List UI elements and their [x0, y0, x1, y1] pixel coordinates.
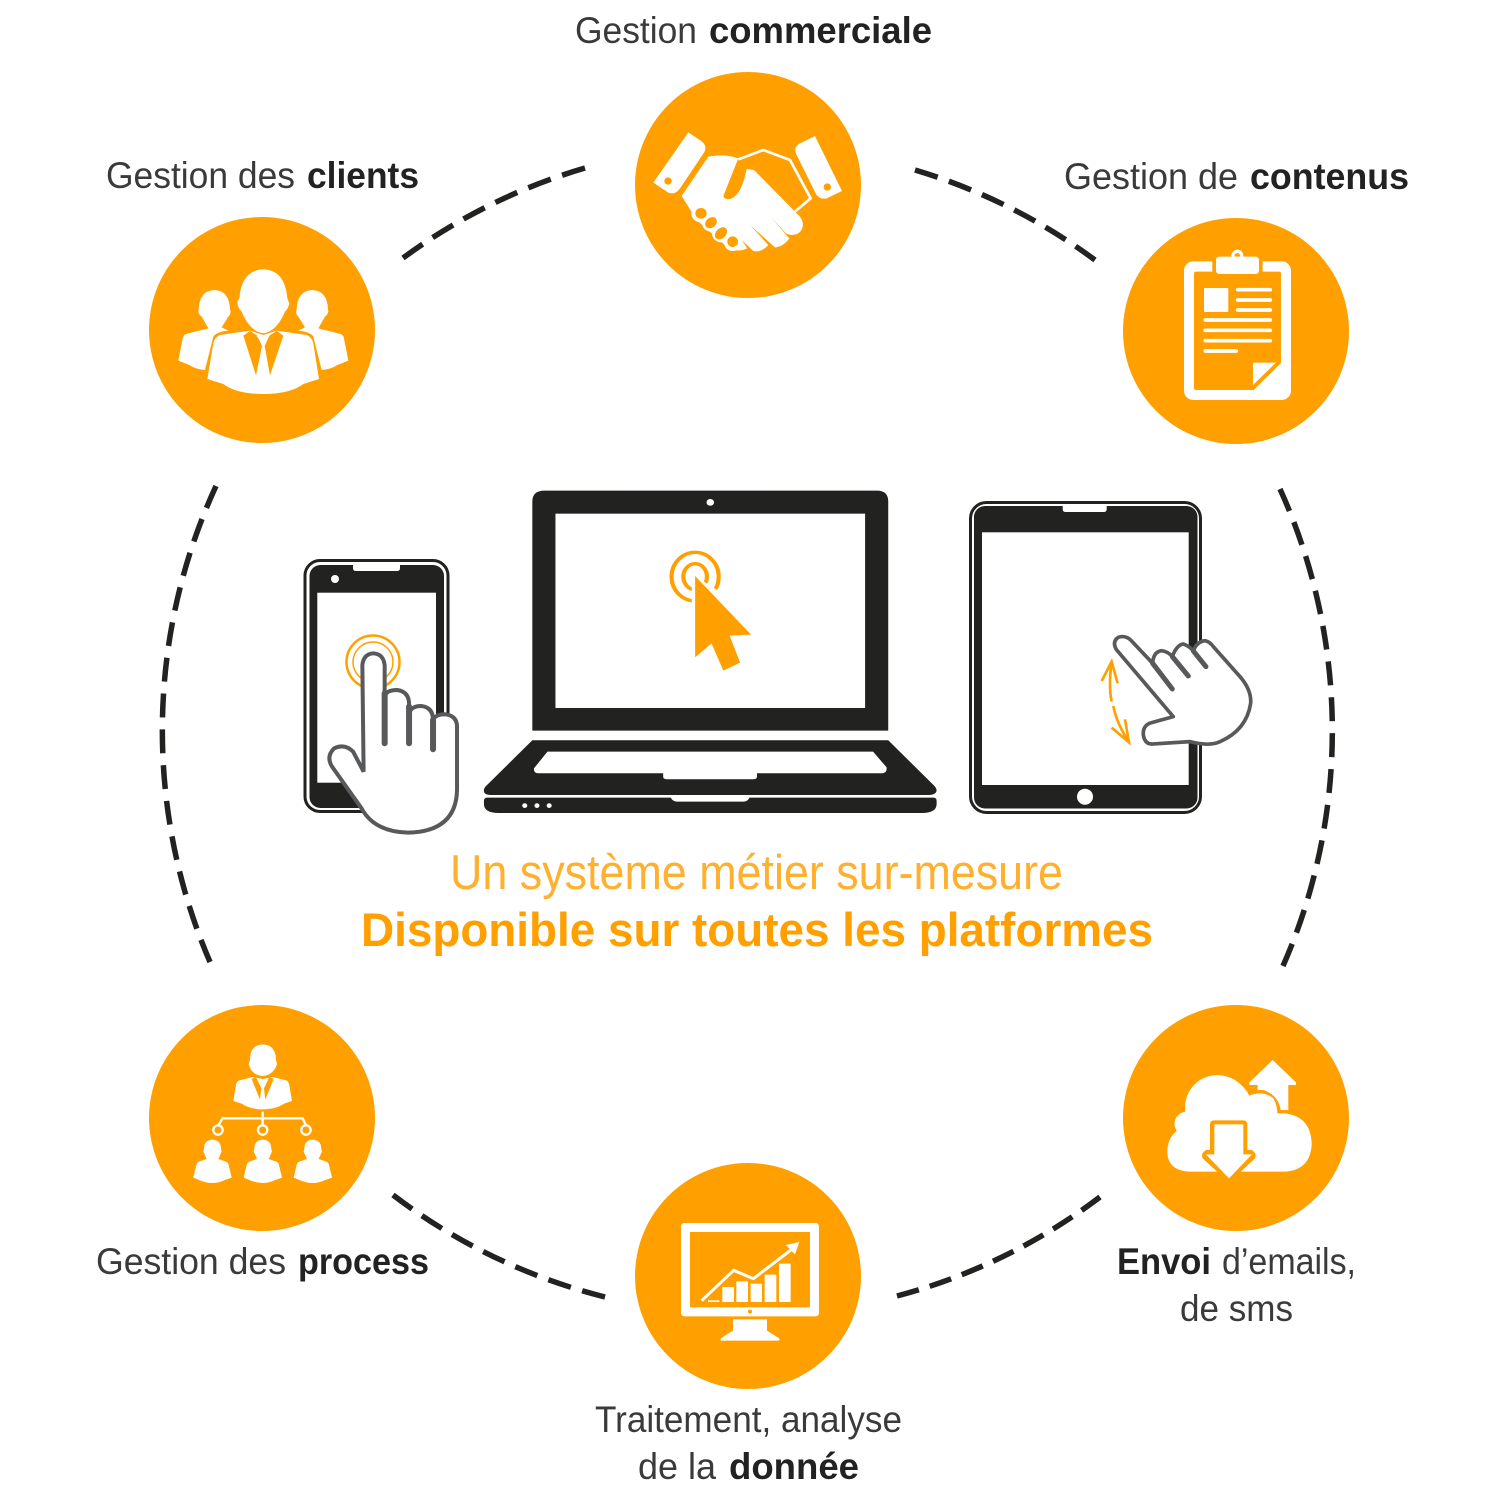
heading: gestion des process — [96, 1241, 429, 1282]
central title: Un système métier sur-mesure — [450, 846, 1063, 900]
icon circle: cloud upload and download — [1123, 1005, 1349, 1231]
phone with touching hand — [305, 560, 457, 833]
icon circle: clipboard — [1123, 218, 1349, 444]
laptop with orange cursor — [484, 491, 937, 813]
panel: gestion des process — [96, 1005, 429, 1282]
heading: gestion commerciale: Gestion — [575, 10, 697, 51]
heading: gestion de contenus: Gestion de — [1064, 156, 1238, 197]
heading: gestion commerciale — [575, 10, 932, 51]
heading: traitement, analyse de la donnée: Traitement, analyse — [595, 1399, 902, 1440]
heading: envoi d'emails, de sms: d’emails, — [1222, 1241, 1356, 1282]
panel: traitement, analyse de la donnée — [595, 1163, 902, 1487]
heading: envoi d'emails, de sms: de sms — [1180, 1288, 1293, 1329]
icon circle: organisation chart — [149, 1005, 375, 1231]
heading: envoi d'emails, de sms — [1117, 1241, 1356, 1329]
heading: traitement, analyse de la donnée: de la — [638, 1446, 716, 1487]
heading: gestion des clients: Gestion des — [106, 155, 295, 196]
panel: envoi d'emails, de sms — [1117, 1005, 1356, 1329]
heading: gestion des process: Gestion des — [96, 1241, 286, 1282]
panel: gestion de contenus — [1064, 156, 1409, 444]
heading: gestion des clients — [106, 155, 419, 196]
icon circle: monitor with rising chart — [635, 1163, 861, 1389]
panel: gestion commerciale — [575, 10, 932, 298]
heading: gestion de contenus: contenus — [1250, 156, 1409, 197]
heading: traitement, analyse de la donnée — [595, 1399, 902, 1487]
central title: Disponible sur toutes les platformes — [361, 903, 1153, 956]
heading: gestion des clients: clients — [307, 155, 419, 196]
tablet with swiping hand — [970, 502, 1251, 812]
heading: gestion des process: process — [298, 1241, 429, 1282]
heading: envoi d'emails, de sms: Envoi — [1117, 1241, 1211, 1282]
dashed ring connecting the six modules — [162, 168, 1332, 1297]
heading: gestion de contenus — [1064, 156, 1409, 197]
panel: gestion des clients — [106, 155, 419, 443]
central title — [361, 846, 1153, 956]
heading: traitement, analyse de la donnée: donnée — [729, 1446, 859, 1487]
heading: gestion commerciale: commerciale — [709, 10, 932, 51]
icon circle: team of people — [149, 217, 375, 443]
icon circle: handshake — [635, 72, 861, 298]
